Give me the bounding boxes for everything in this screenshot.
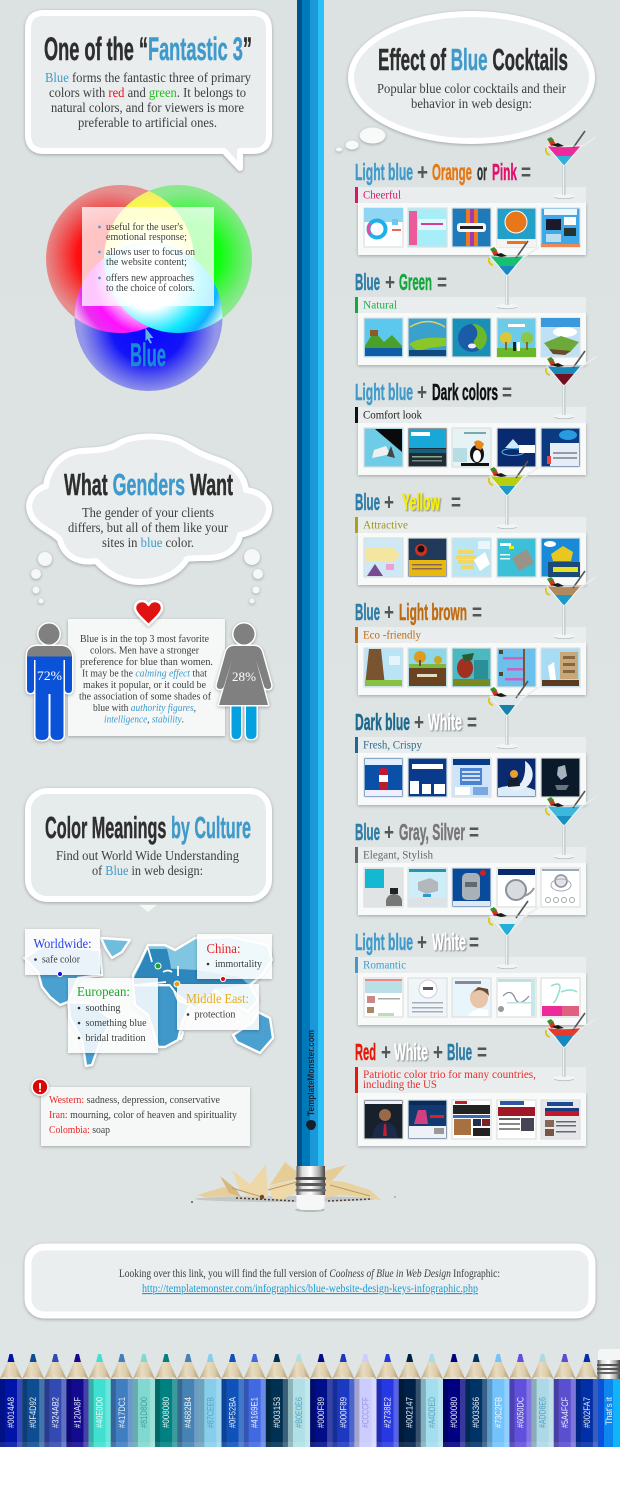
cloud text [68, 506, 228, 551]
section: Light blue + Orange or Pink [355, 131, 596, 255]
heading: Light blue [355, 929, 413, 955]
panel and label [355, 407, 586, 475]
icon: man figure 72% [27, 624, 72, 740]
culture text: of Blue in web design: [92, 864, 203, 879]
icon: cocktail red [546, 1013, 596, 1081]
central blue pencil [297, 0, 324, 1166]
pencil #4169E1: #4169E1 [250, 1397, 260, 1428]
pencil #A4DDED [420, 1354, 443, 1447]
card: Worldwide: Worldwide: [34, 937, 92, 952]
culture text [56, 849, 239, 879]
heading: Red [355, 1039, 376, 1065]
heading: = [469, 929, 479, 955]
heading: Blue [355, 269, 380, 295]
panel and label [355, 957, 586, 1025]
panel and label [355, 517, 586, 585]
pencil #2738E2: #2738E2 [383, 1397, 393, 1428]
panel: other culture meanings: Western: sadness, depression, conservative [49, 1094, 220, 1106]
pencil #CCCCFF [354, 1354, 377, 1447]
heading: or [477, 159, 487, 185]
cocktails intro text [377, 82, 566, 112]
pencil #417DC1 [110, 1354, 133, 1447]
heading [355, 819, 479, 845]
heading: + [417, 379, 427, 405]
pencil #0014A8: #0014A8 [6, 1397, 16, 1428]
icon: monster logo [306, 1120, 316, 1130]
icon: cocktail pink [546, 131, 596, 199]
heading: + [384, 599, 394, 625]
heading: = [469, 819, 479, 845]
pencil #000080: #000080 [449, 1397, 459, 1428]
pencil #003153 [265, 1354, 288, 1447]
card: European: soothing [86, 1002, 121, 1014]
heading: Color Meanings by Culture: Color Meanings by Culture [45, 810, 251, 845]
heading: Dark colors [432, 379, 498, 405]
pencil shavings [191, 1162, 396, 1203]
website thumbnails [364, 428, 580, 467]
website thumbnails [364, 1100, 580, 1139]
panel: gender preference text: Blue is in the top 3 most favorite [80, 633, 209, 645]
card: China [197, 934, 272, 979]
panel and label: Romantic [363, 958, 406, 972]
website thumbnails [364, 868, 580, 907]
heading: What Genders Want: What Genders Want [64, 467, 233, 502]
heading: Blue [355, 819, 380, 845]
pencil #B0E0E6: #B0E0E6 [294, 1397, 304, 1428]
card: European: something blue [86, 1017, 147, 1029]
heading: Dark blue [355, 709, 410, 735]
card: Middle East [177, 984, 259, 1030]
heading: One of the Fantastic 3: One of the “Fantastic 3” [44, 31, 252, 67]
icon: woman figure 28% [217, 624, 271, 739]
pencil #000F89: #000F89 [316, 1397, 326, 1428]
panel: gender preference text: blue with authority figures, [93, 702, 196, 714]
pencil #2738E2 [376, 1354, 399, 1447]
section: Blue + Yellow [355, 461, 586, 585]
website thumbnails [364, 758, 580, 797]
last pencil with eraser: That's it [604, 1397, 614, 1425]
Venn list box: offers new approaches [106, 272, 194, 284]
panel: gender preference text: the association of some shades of [79, 690, 211, 702]
card: Worldwide: safe color [42, 954, 80, 966]
heading: Orange [432, 159, 472, 185]
website thumbnails [364, 318, 580, 357]
pencil #0014A8 [0, 1354, 22, 1447]
intro text: colors with red and green. It belongs to [49, 86, 246, 101]
Venn list box: to the choice of colors. [106, 282, 195, 294]
pencil #324AB2 [44, 1354, 67, 1447]
intro text: natural colors, and for viewers is more [51, 101, 244, 116]
footer link: http://templatemonster.com/infographics/blue-website-design-keys-infographic.php [142, 1283, 478, 1295]
panel: What Genders Want cloud [29, 436, 269, 604]
icon: cocktail yellow [489, 461, 539, 529]
pencil #0F52BA: #0F52BA [228, 1397, 238, 1428]
heading: = [521, 159, 531, 185]
last pencil with eraser [597, 1349, 620, 1447]
card: Middle East: protection [194, 1008, 236, 1020]
intro text: Blue forms the fantastic three of primary [45, 71, 251, 86]
heading: = [451, 489, 461, 515]
panel and label [355, 627, 586, 695]
panel and label [355, 187, 586, 255]
chart: RGB Venn diagram [46, 185, 252, 391]
pencil #000F89 second [332, 1354, 355, 1447]
section: Blue + Light brown [355, 571, 596, 695]
pencil #40E0D0 [88, 1354, 111, 1447]
heading: = [472, 599, 482, 625]
heading: Light brown [399, 599, 467, 625]
card: European [68, 978, 158, 1053]
icon: man figure 72%: 72% [37, 668, 62, 683]
pencil #87CEEB [199, 1354, 222, 1447]
cocktails intro text: behavior in web design: [411, 97, 532, 112]
pencil #324AB2: #324AB2 [50, 1397, 60, 1428]
heading: Gray, Silver [399, 819, 465, 845]
Venn list box: allows user to focus on [106, 246, 195, 258]
heading [355, 599, 482, 625]
heading: + [384, 819, 394, 845]
intro text: preferable to artificial ones. [78, 116, 217, 131]
pencil #0F4D92 [22, 1354, 45, 1447]
pencil #4682B4: #4682B4 [183, 1397, 193, 1428]
section: Light blue + Dark colors [355, 351, 596, 475]
website thumbnails [364, 538, 580, 577]
heading: + [414, 709, 424, 735]
section: Light blue + White [355, 901, 586, 1025]
pencil #000F89 second: #000F89 [338, 1397, 348, 1428]
row of color pencils [0, 1349, 620, 1447]
heading: + [384, 489, 394, 515]
world map [24, 929, 273, 1066]
label: Blue: Blue [130, 337, 166, 373]
pencil #008080: #008080 [161, 1397, 171, 1428]
pencil #6050DC [509, 1354, 532, 1447]
heading: Blue [355, 489, 380, 515]
footer text: Looking over this link, you will find the full version of Coolness of Blue in Web Design Infographic: [119, 1268, 500, 1280]
panel: link footer [28, 1247, 592, 1315]
panel and label: Patriotic color trio for many countries, [363, 1067, 536, 1081]
section: Dark blue + White [355, 681, 586, 805]
website thumbnails [364, 648, 580, 687]
icon: cocktail silver [546, 791, 596, 859]
pencil #CCCCFF: #CCCCFF [360, 1397, 370, 1428]
panel: Effect of Blue Cocktails bubble [336, 14, 592, 152]
pencil #B0E0E6 [287, 1354, 310, 1447]
panel: Fantastic 3 speech bubble [28, 13, 269, 168]
website thumbnails [364, 208, 580, 247]
heading: Light blue [355, 159, 413, 185]
icon: cursor arrow [146, 328, 154, 344]
panel: gender preference text: colors. Men have a stronger [90, 644, 199, 656]
heading: = [437, 269, 447, 295]
panel: other culture meanings [41, 1087, 250, 1146]
pencil #120A8F [66, 1354, 89, 1447]
icon: cocktail white [489, 681, 539, 749]
heading: Light blue [355, 379, 413, 405]
icon: cocktail light [489, 901, 539, 969]
panel and label: Fresh, Crispy [363, 738, 422, 752]
map location dots [57, 963, 226, 987]
heading: White [428, 709, 462, 735]
panel and label [355, 737, 586, 805]
heading [355, 489, 461, 515]
panel and label: Elegant, Stylish [363, 848, 433, 862]
panel and label: Attractive [363, 518, 408, 532]
icon: alert [32, 1079, 48, 1095]
pencil #87CEEB: #87CEEB [205, 1397, 215, 1428]
pencil #000F89 [310, 1354, 333, 1447]
cloud text: sites in blue color. [102, 536, 194, 551]
pencil #40E0D0: #40E0D0 [95, 1397, 105, 1428]
pencil #002FA7: #002FA7 [582, 1397, 592, 1428]
card: China: immortality [215, 958, 262, 970]
pencil #0F52BA [221, 1354, 244, 1447]
heading: Blue [355, 599, 380, 625]
heading: White [432, 929, 466, 955]
Venn list box: useful for the user's [106, 221, 183, 233]
Venn list box [82, 207, 214, 306]
panel and label: Eco -friendly [363, 628, 421, 642]
website thumbnails [364, 978, 580, 1017]
pencil #ADD8E6: #ADD8E6 [538, 1397, 548, 1428]
panel: gender preference text: makes it popular, or it could be [83, 679, 206, 691]
heading: Blue [447, 1039, 472, 1065]
cloud text: differs, but all of them like your [68, 521, 228, 536]
pencil #002FA7 [575, 1354, 598, 1447]
icon: cocktail brown [546, 571, 596, 639]
heading [355, 269, 447, 295]
pencil #81D8D0 [132, 1354, 155, 1447]
heading: Yellow [402, 489, 440, 515]
pencil #4682B4 [177, 1354, 200, 1447]
icon: cocktail green [489, 241, 539, 309]
panel and label: Comfort look [363, 408, 422, 422]
pencil #003366: #003366 [471, 1397, 481, 1428]
panel: gender preference text: preference for blue than women. [80, 656, 213, 668]
heading: + [433, 1039, 443, 1065]
panel: other culture meanings: Iran: mourning, color of heaven and spirituality [49, 1109, 237, 1121]
pencil #417DC1: #417DC1 [117, 1397, 127, 1428]
panel: gender preference text: It may be the calming effect that [82, 668, 207, 680]
pencil #002147: #002147 [405, 1397, 415, 1428]
pencil #000080 [442, 1354, 466, 1447]
pencil #5A4FCF: #5A4FCF [560, 1397, 570, 1428]
icon: alert: ! [38, 1080, 42, 1095]
thought dots [31, 549, 263, 604]
card: China: China: [206, 942, 240, 957]
pencil #73C2FB: #73C2FB [493, 1397, 503, 1428]
heading: White [394, 1039, 428, 1065]
pencil #008080 [155, 1354, 178, 1447]
pencil #003153: #003153 [272, 1397, 282, 1428]
heading [355, 1039, 487, 1065]
icon: woman figure 28%: 28% [232, 669, 256, 684]
icon: heart [135, 601, 162, 625]
panel and label: Cheerful [363, 188, 402, 202]
pencil #0F4D92: #0F4D92 [28, 1397, 38, 1428]
heading [355, 379, 512, 405]
heading: + [417, 159, 428, 185]
heading [355, 159, 531, 185]
section: Blue + Green [355, 241, 586, 365]
card: European: bridal tradition [86, 1032, 146, 1044]
pencil #120A8F: #120A8F [72, 1397, 82, 1428]
pencil #003366 [465, 1354, 488, 1447]
pencil #73C2FB [487, 1354, 510, 1447]
panel: Color Meanings by Culture [28, 791, 269, 912]
panel and label [355, 847, 586, 915]
card: Worldwide [25, 929, 100, 975]
pencil #81D8D0: #81D8D0 [139, 1397, 149, 1428]
pencil #A4DDED: #A4DDED [427, 1397, 437, 1428]
panel and label: including the US [363, 1077, 437, 1091]
heading: = [477, 1039, 487, 1065]
culture text: Find out World Wide Understanding [56, 849, 239, 864]
card: European: European: [77, 985, 130, 1000]
pencil #4169E1 [243, 1354, 266, 1447]
panel and label [355, 297, 586, 365]
intro text [45, 71, 251, 131]
brand label on pencil: TemplateMonster.com [306, 1030, 316, 1116]
pencil #002147 [398, 1354, 421, 1447]
heading: = [502, 379, 512, 405]
section: Red + White + Blue [355, 1013, 596, 1146]
heading: Green [399, 269, 432, 295]
bubble pointer [139, 905, 157, 912]
heading: + [381, 1039, 391, 1065]
cloud text: The gender of your clients [82, 506, 214, 521]
panel and label: Natural [363, 298, 398, 312]
pencil #ADD8E6 [531, 1354, 554, 1447]
section: Blue + Gray, Silver [355, 791, 596, 915]
icon: cocktail dark [546, 351, 596, 419]
pencil #6050DC: #6050DC [515, 1397, 525, 1428]
heading: Pink [492, 159, 517, 185]
heading: + [385, 269, 395, 295]
panel and label [355, 1067, 586, 1146]
heading: = [467, 709, 477, 735]
card: Middle East: Middle East: [186, 992, 249, 1007]
pencil #5A4FCF [553, 1354, 576, 1447]
panel: gender preference text [68, 619, 225, 736]
panel: gender preference text: intelligence, stability. [104, 714, 184, 726]
Venn list box: emotional response; [106, 231, 187, 243]
heading: + [417, 929, 427, 955]
panel: other culture meanings: Colombia: soap [49, 1124, 110, 1136]
Venn list box: the website content; [106, 256, 187, 268]
pencil ferrule and eraser [295, 1166, 326, 1212]
cocktails intro text: Popular blue color cocktails and their [377, 82, 566, 97]
